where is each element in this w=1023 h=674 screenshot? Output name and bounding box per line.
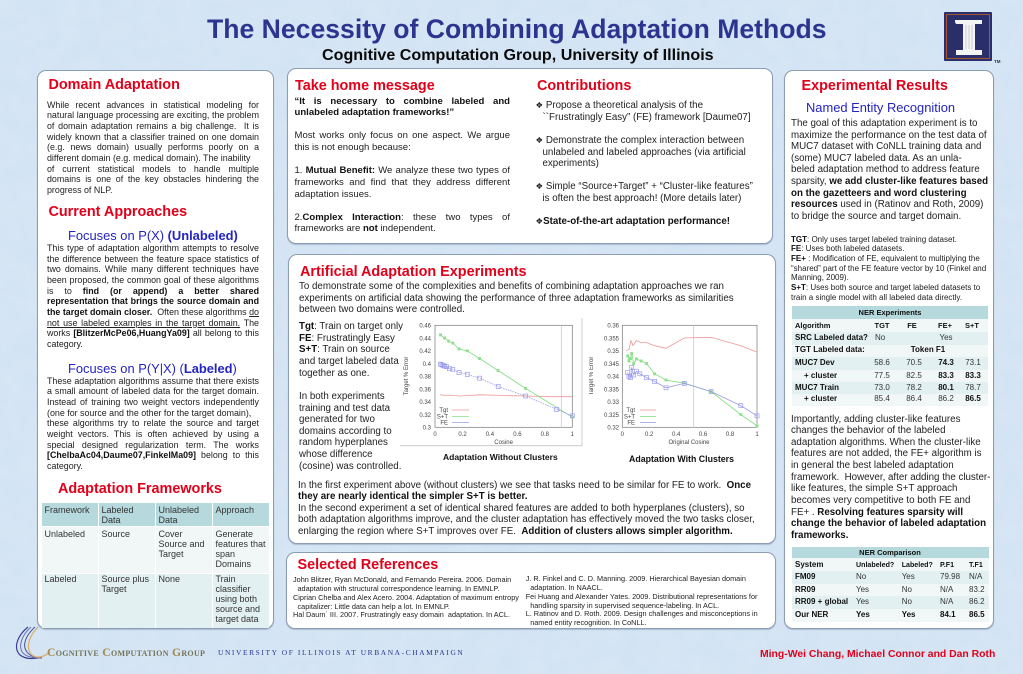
text: take home message: frameworks are not independent. <box>294 223 436 234</box>
chart: adaptation without clusters: 0.34 <box>419 400 432 406</box>
chart: adaptation without clusters: 0.32 <box>419 413 432 419</box>
chart: adaptation without clusters: 0.6 <box>513 432 522 438</box>
text: experiment conclusions: they are nearly identical the simpler S+T is better. <box>298 491 528 502</box>
table: NER comparison: RR09 <box>795 585 815 594</box>
chart: adaptation without clusters: 1 <box>571 432 575 438</box>
text: experiment conclusions: In the second experiment a set of identical shared features are added to both hyperplanes (clusters), so <box>298 503 745 514</box>
text: experiment method legend: In both experiments <box>299 391 385 402</box>
table: NER experiments: No <box>875 333 885 342</box>
table: NER comparison: Labeled? <box>902 561 933 569</box>
title: The Necessity of Combining Adaptation Methods <box>207 14 827 44</box>
text: take home message: Most works only focus on one aspect. We argue <box>294 130 510 141</box>
table: NER experiments: SRC Labeled data? <box>795 333 868 342</box>
text: method definitions: train a single model with all labeled data directly. <box>791 293 962 302</box>
subheading: focuses on P(Y|X): Focuses on P(Y|X) (Labeled) <box>68 360 237 376</box>
table: adaptation frameworks: Data <box>102 514 121 524</box>
chart: adaptation with clusters: 1 <box>755 432 759 438</box>
text: cluster feature findings: framework. However, after adding the cluster- <box>791 472 990 483</box>
chart: adaptation without clusters: 0.8 <box>541 432 550 438</box>
table: NER comparison: P.F1 <box>940 561 954 569</box>
table: NER experiments: + cluster <box>804 371 837 380</box>
text: cluster feature findings: becomes very competitive to both FE and <box>791 495 970 506</box>
text: take home message: “It is necessary to combine labeled and <box>294 96 510 106</box>
text: references right column: named entity recognition. In CoNLL. <box>530 618 647 627</box>
table: NER experiments: S+T <box>965 321 979 330</box>
table: NER comparison: Yes <box>902 572 915 581</box>
heading: selected references: Selected References <box>298 557 438 573</box>
table: NER experiments: NER Experiments <box>859 308 921 316</box>
text: take home message: frameworks and find that they address different <box>294 177 510 188</box>
table: NER experiments: 78.2 <box>906 383 922 392</box>
chart: adaptation without clusters: Target % Error <box>404 357 410 395</box>
table: NER experiments: FE <box>907 321 917 330</box>
text: results intro: on the gazetteers and word clustering <box>791 188 967 199</box>
text: contributions list: ❖ Demonstrate the complex interaction between <box>536 135 744 146</box>
table: NER comparison: Yes <box>856 610 870 619</box>
heading: domain adaptation: Domain Adaptation <box>48 77 180 93</box>
table: adaptation frameworks: Framework <box>44 504 90 514</box>
chart: adaptation with clusters: 0.35 <box>607 349 620 355</box>
subheading: named entity recognition: Named Entity Recognition <box>806 100 955 115</box>
text: experiment method legend: generated for two <box>299 414 375 425</box>
text: experiment method legend: Tgt: Train on target only <box>299 321 403 332</box>
text: cluster feature findings: adaptation algorithms. When the cluster-like <box>791 437 981 448</box>
text: results intro: maximize the performance on the test data of <box>791 130 987 141</box>
heading: contributions: Contributions <box>537 78 631 94</box>
chart: adaptation with clusters: 0.335 <box>604 387 620 393</box>
table: adaptation frameworks: Data <box>158 514 178 524</box>
text: references left column: Hal Daum´ III. 2007. Frustratingly easy domain adaptation. In ACL. <box>293 610 510 619</box>
text: experiment method legend: together as one. <box>299 368 369 379</box>
table: NER comparison: NER Comparison <box>859 548 921 557</box>
table: NER comparison: No <box>856 572 866 581</box>
chart: adaptation without clusters: 0.2 <box>458 432 467 438</box>
table: NER comparison: Yes <box>856 585 869 594</box>
table: NER experiments: Yes <box>939 333 953 342</box>
table: NER experiments: 77.5 <box>874 371 890 380</box>
text: experiment method legend: domains according to <box>299 426 392 437</box>
table: adaptation frameworks: Labeled <box>102 504 134 514</box>
table: NER experiments: 83.3 <box>938 371 954 380</box>
text: contributions list: ``Frustratingly Easy” (FE) framework [Daume07] <box>542 112 751 123</box>
table: adaptation frameworks: Cover <box>158 528 183 538</box>
table: NER experiments: 83.3 <box>965 371 981 380</box>
table: NER experiments: 78.7 <box>965 383 981 392</box>
text: unlabeled approaches: This type of adaptation algorithm attempts to resolve <box>47 243 259 253</box>
chart: adaptation with clusters: 0 <box>621 432 625 438</box>
chart: adaptation without clusters: 0 <box>433 432 437 438</box>
chart: adaptation without clusters: S+T <box>437 414 448 420</box>
text: method definitions: S+T: Uses both source and target labeled datasets to <box>791 283 980 292</box>
table: adaptation frameworks: Target <box>158 548 184 558</box>
text: results intro: to bridge the source and target domain. <box>791 211 961 222</box>
table: NER comparison: Yes <box>856 597 869 606</box>
text: references right column: L. Ratinov and D. Roth. 2009. Design challenges and misconceptions in <box>526 609 758 618</box>
table: NER comparison: No <box>902 585 912 594</box>
chart: adaptation with clusters: FE <box>627 420 635 426</box>
table: NER experiments: 80.1 <box>938 383 954 392</box>
text: domain adaptation intro: of domain adaptation remains a big challenge. It is <box>47 121 259 131</box>
table: adaptation frameworks: Train <box>216 574 236 584</box>
panel: artificial adaptation experiments <box>288 254 776 544</box>
text: references right column: handling sparsity in supervised sequence-labeling. In ACL. <box>530 600 719 610</box>
text: labeled approaches: category. <box>47 461 83 471</box>
text: domain adaptation intro: domains is one of the key obstacles hindering the <box>47 174 259 184</box>
text: results intro: resources used in (Ratinov and Roth, 2009) <box>791 199 983 210</box>
text: labeled approaches <box>47 376 259 471</box>
text: labeled approaches: a small amount of labeled data for the target domain. <box>47 386 259 396</box>
text: domain adaptation intro: widely known that a classifier trained on one domain <box>47 132 259 142</box>
chart caption: without clusters: Adaptation Without Clusters <box>443 452 558 462</box>
text: references left column: adaptation with structural correspondence learning. In EMNLP. <box>298 584 499 593</box>
text: cluster feature findings: Importantly, adding cluster-like features <box>791 414 960 424</box>
table: NER comparison: 86.5 <box>969 610 985 619</box>
text: cluster feature findings: features are not added, the FE+ algorithm is <box>791 448 982 459</box>
table: adaptation frameworks: Domains <box>216 558 251 568</box>
text: unlabeled approaches: two domains. While many different techniques have <box>47 264 259 274</box>
chart: adaptation without clusters: 0.38 <box>419 374 432 380</box>
text: experiment method legend: FE: Frustratingly Easy <box>299 333 395 344</box>
text: labeled approaches: these algorithms try to relate the source and target <box>47 418 259 428</box>
text: experiment method legend: (cosine) was controlled. <box>299 461 401 472</box>
chart: adaptation with clusters: Target % Error <box>589 357 595 395</box>
table: NER experiments: TGT Labeled data: <box>795 345 865 354</box>
text: experiment conclusions <box>298 480 755 537</box>
text: domain adaptation intro: of current statistical models to handle multiple <box>47 164 259 174</box>
text: method definitions: Manning, 2009). <box>791 273 849 282</box>
text: references left column: Ciprian Chelba and Alex Acero. 2004. Adaptation of maximum entropy <box>293 593 519 602</box>
chart: adaptation without clusters: 0.36 <box>419 387 432 393</box>
text: unlabeled approaches: works [BlitzerMcPe06,HuangYa09] all belong to this <box>47 328 259 338</box>
icon: university logo <box>944 12 1001 64</box>
text: domain adaptation intro: (e.g. news domain) usually performs poorly on a <box>47 142 259 152</box>
text: labeled approaches: weight vectors. This is often achieved by using a <box>47 429 259 439</box>
chart: adaptation without clusters: 0.4 <box>486 432 495 438</box>
text: labeled approaches: (one for source and the other for the target domain), <box>47 408 251 418</box>
table: NER experiments: 86.5 <box>965 394 981 403</box>
table: NER experiments: 73.1 <box>965 358 981 367</box>
text: domain adaptation intro: natural language processing are exciting, the problem <box>47 110 259 120</box>
text: contributions list <box>536 100 753 227</box>
text: cluster feature findings: change the behavior of labeled adaptation <box>791 518 986 529</box>
table: adaptation frameworks: Source and <box>158 538 205 548</box>
chart: adaptation with clusters: 0.34 <box>607 374 620 380</box>
table: NER comparison: 84.1 <box>940 610 956 619</box>
table: NER experiments: Algorithm <box>795 321 830 330</box>
icon: cognitive computation group swoosh <box>16 626 50 660</box>
text: experiments intro: experiments on artificial data showing the performance of three adaptation frameworks as similarities <box>299 293 734 304</box>
text: domain adaptation intro: different domain (e.g. medical domain). The inability <box>47 153 250 163</box>
text: unlabeled approaches: the target domain closer. Often these algorithms do <box>47 307 259 317</box>
table: adaptation frameworks <box>42 503 269 628</box>
footer: authors: Ming-Wei Chang, Michael Connor and Dan Roth <box>760 649 995 660</box>
text: experiment conclusions: enlarging the region where S+T improves over FE. Addition of clusters allows simpler algorithm. <box>298 526 733 537</box>
text: cluster feature findings: frameworks. <box>791 530 848 541</box>
table: NER experiments: Token F1 <box>911 345 945 354</box>
text: contributions list: experiments) <box>542 158 599 169</box>
table: NER experiments <box>792 306 988 406</box>
text: unlabeled approaches: representation that brings the source domain and <box>47 296 259 306</box>
text: domain adaptation intro: While recent advances in statistical modeling for <box>47 100 259 110</box>
text: unlabeled approaches: been proposed, the common goal of these algorithms <box>47 275 259 285</box>
table: NER experiments: 82.5 <box>906 371 922 380</box>
subtitle: Cognitive Computation Group, University of Illinois <box>322 46 714 64</box>
table: NER experiments: TGT <box>874 321 890 330</box>
table: adaptation frameworks: using both <box>216 594 257 604</box>
text: contributions list: ❖ Propose a theoretical analysis of the <box>536 100 703 111</box>
text: labeled approaches: These adaptation algorithms assume that there exists <box>47 376 259 386</box>
chart: adaptation without clusters: 0.46 <box>419 324 432 330</box>
chart: adaptation without clusters: 0.4 <box>423 362 432 368</box>
text: unlabeled approaches: not use labeled examples in the target domain. The <box>47 318 259 328</box>
chart: adaptation without clusters <box>400 318 582 446</box>
table: NER experiments: MUC7 Train <box>795 383 839 392</box>
chart: adaptation without clusters: FE <box>440 420 448 426</box>
table: NER experiments: + cluster <box>804 394 837 403</box>
subheading: focuses on P(X): Focuses on P(X) (Unlabeled) <box>68 228 238 242</box>
chart: adaptation without clusters: 0.3 <box>423 426 432 432</box>
text: references right column <box>526 574 758 627</box>
table: NER experiments: 86.4 <box>906 394 922 403</box>
text: results intro: (some) MUC7 labeled data. As an unla- <box>791 153 962 164</box>
text: results intro: sparsity, we add cluster-like features based <box>791 176 988 187</box>
text: method definitions: TGT: Only uses target labeled training dataset. <box>791 234 957 244</box>
chart: adaptation with clusters: 0.325 <box>604 413 620 419</box>
table: NER experiments: 86.2 <box>938 394 954 403</box>
heading: take home message: Take home message <box>295 78 435 94</box>
panel: take home and contributions <box>287 68 773 244</box>
chart: adaptation with clusters: Original Cosine <box>668 440 710 446</box>
text: take home message: adaptation issues. <box>294 188 371 200</box>
text: labeled approaches: [ChelbaAc04,Daume07,FinkelMa09] belong to this <box>47 450 259 460</box>
chart caption: with clusters: Adaptation With Clusters <box>629 454 734 464</box>
text: experiment method legend: training and test data <box>299 403 390 414</box>
chart: adaptation with clusters: 0.32 <box>607 426 620 432</box>
text: experiment method legend <box>299 321 403 472</box>
text: unlabeled approaches: the difference between the feature space statistics of <box>47 254 259 264</box>
text: experiments intro: To demonstrate some of the complexities and benefits of combining adaptation approaches we ran <box>299 281 724 292</box>
text: results intro <box>791 118 988 222</box>
chart: adaptation without clusters: Tgt <box>439 408 448 414</box>
text: results intro: beled adaptation method to address feature <box>791 164 980 175</box>
table: NER experiments: 58.6 <box>874 358 890 367</box>
text: take home message: unlabeled adaptation frameworks!” <box>294 107 454 118</box>
table: NER comparison: 86.2 <box>969 597 985 606</box>
text: experiment method legend: and target labeled data <box>299 356 399 367</box>
chart: adaptation with clusters: 0.345 <box>604 362 620 368</box>
table: adaptation frameworks: classifier <box>216 584 251 594</box>
text: cluster feature findings: FE+ . Resolving features sparsity will <box>791 506 963 518</box>
heading: current approaches: Current Approaches <box>48 204 187 220</box>
text: method definitions <box>791 234 986 302</box>
text: references left column <box>293 575 519 619</box>
text: references left column: John Blitzer, Ryan McDonald, and Fernando Pereira. 2006. Domain <box>293 575 511 584</box>
table: adaptation frameworks: features that <box>216 538 266 548</box>
table: NER comparison: N/A <box>940 597 953 606</box>
table: NER experiments: 74.3 <box>938 358 954 367</box>
text: unlabeled approaches: is to find (or append) a better shared <box>47 286 259 296</box>
table: adaptation frameworks: Source plus <box>102 574 149 584</box>
text: take home message: 1. Mutual Benefit: We analyze these two types of <box>294 165 510 176</box>
table: NER comparison: 79.98 <box>940 572 960 581</box>
table: NER experiments: MUC7 Dev <box>795 358 835 367</box>
heading: experimental results: Experimental Results <box>802 78 948 94</box>
table: NER comparison: No <box>902 597 912 606</box>
chart: adaptation with clusters: 0.4 <box>672 432 681 438</box>
text: results intro: MUC7 dataset with CoNLL training data and <box>791 141 981 152</box>
text: experiments intro: between two domains were controlled. <box>299 304 465 315</box>
text: results intro: The goal of this adaptation experiment is to <box>791 118 977 129</box>
table: NER comparison: N/A <box>969 572 982 581</box>
heading: artificial adaptation experiments: Artificial Adaptation Experiments <box>300 264 527 280</box>
text: contributions list: ❖ Simple “Source+Target” + “Cluster-like features” <box>536 181 753 192</box>
chart: adaptation with clusters: 0.2 <box>645 432 654 438</box>
table: adaptation frameworks: Approach <box>216 504 254 514</box>
table: NER experiments: 73.0 <box>874 383 890 392</box>
table: adaptation frameworks: target data <box>216 614 259 624</box>
panel: domain adaptation <box>37 70 274 629</box>
text: labeled approaches: Instead of training two weight vectors independently <box>47 397 259 407</box>
panel: selected references <box>286 552 776 629</box>
table: NER comparison: RR09 + global <box>795 597 848 606</box>
text: contributions list: is often the best approach! (More details later) <box>542 193 741 204</box>
chart: adaptation with clusters: 0.36 <box>607 324 620 330</box>
text: contributions list: unlabeled and labeled approaches (via artificial <box>542 146 746 158</box>
text: experiments intro <box>299 281 734 315</box>
table: adaptation frameworks: span <box>216 548 235 558</box>
chart: adaptation with clusters <box>589 323 760 446</box>
text: domain adaptation intro <box>47 100 260 195</box>
text: references left column: capitalizer: Little data can help a lot. In EMNLP. <box>298 602 450 610</box>
chart: adaptation without clusters: 0.42 <box>419 349 432 355</box>
text: references right column: Fei Huang and Alexander Yates. 2009. Distributional representations for <box>526 592 757 601</box>
table: NER comparison: 83.2 <box>969 585 985 594</box>
text: references right column: J. R. Finkel and C. D. Manning. 2009. Hierarchical Bayesian domain <box>526 574 746 583</box>
text: method definitions: FE: Uses both labeled datasets. <box>791 244 904 253</box>
footer: group name: Cognitive Computation Group <box>47 646 205 658</box>
footer: university name: UNIVERSITY OF ILLINOIS AT URBANA-CHAMPAIGN <box>218 648 464 657</box>
table: adaptation frameworks: Generate <box>216 528 253 538</box>
table: NER comparison: Yes <box>902 610 915 619</box>
chart: adaptation with clusters: Tgt <box>626 408 635 414</box>
table: adaptation frameworks: Target <box>102 584 127 594</box>
table: adaptation frameworks: Labeled <box>44 574 77 584</box>
panel: experimental results <box>784 70 994 629</box>
text: cluster feature findings: changes the behavior of the labeled <box>791 425 946 436</box>
table: adaptation frameworks: None <box>158 574 180 584</box>
text: experiment method legend: whose difference <box>299 449 373 460</box>
chart: adaptation with clusters: S+T <box>624 414 635 420</box>
table: NER comparison: T.F1 <box>969 561 983 569</box>
text: cluster feature findings <box>791 414 990 541</box>
chart: adaptation with clusters: 0.33 <box>607 400 620 406</box>
text: cluster feature findings: in general the best labeled adaptation <box>791 460 954 471</box>
table: NER comparison: FM09 <box>795 572 815 581</box>
table: NER comparison: N/A <box>940 585 953 594</box>
text: experiment conclusions: both adaptation algorithms improve, and the cluster adaptation has effectively moved the two tasks closer, <box>298 514 755 525</box>
table: adaptation frameworks: Unlabeled <box>44 528 85 538</box>
text: experiment conclusions: In the first experiment above (without clusters) we see that tasks need to be similar for FE to work. Once <box>298 480 751 490</box>
text: method definitions: FE+ : Modification of FE, equivalent to multiplying the <box>791 254 980 263</box>
table: adaptation frameworks: Unlabeled <box>158 504 199 514</box>
text: unlabeled approaches <box>47 243 259 349</box>
heading: adaptation frameworks: Adaptation Frameworks <box>58 481 222 497</box>
table: NER comparison <box>792 547 989 622</box>
text: contributions list: ❖State-of-the-art adaptation performance! <box>536 216 730 227</box>
table: NER experiments: 70.5 <box>906 358 922 367</box>
chart: adaptation with clusters: 0.355 <box>604 336 620 342</box>
table: NER comparison: System <box>795 560 823 569</box>
text: take home message <box>294 96 510 234</box>
chart: adaptation with clusters: 0.8 <box>726 432 735 438</box>
chart: adaptation without clusters: 0.44 <box>419 336 432 342</box>
table: adaptation frameworks: source and <box>216 604 260 614</box>
table: NER experiments: 85.4 <box>874 394 890 403</box>
chart: adaptation without clusters: Cosine <box>494 440 514 446</box>
table: NER comparison: Unlabeled? <box>856 561 894 569</box>
text: experiment method legend: random hyperplanes <box>299 437 388 448</box>
table: NER comparison: Our NER <box>795 610 828 619</box>
text: references right column: adaptation. In NAACL. <box>530 583 603 592</box>
text: take home message: 2.Complex Interaction: these two types of <box>294 212 510 223</box>
text: unlabeled approaches: category. <box>47 339 83 349</box>
text: cluster feature findings: like features, the simple S+T approach <box>791 483 957 494</box>
text: labeled approaches: special designed regularization term. The works <box>47 440 259 450</box>
chart: adaptation with clusters: 0.6 <box>699 432 708 438</box>
table: NER experiments: FE+ <box>938 321 952 330</box>
text: experiment method legend: S+T: Train on source <box>299 344 390 355</box>
table: adaptation frameworks: Source <box>102 528 130 538</box>
text: method definitions: “shared” part of the FE feature vector by 10 (Finkel and <box>791 264 986 273</box>
icon: university logo: TM <box>994 59 1001 64</box>
text: domain adaptation intro: progress of NLP. <box>47 185 112 195</box>
text: take home message: this is not enough because: <box>294 142 411 153</box>
